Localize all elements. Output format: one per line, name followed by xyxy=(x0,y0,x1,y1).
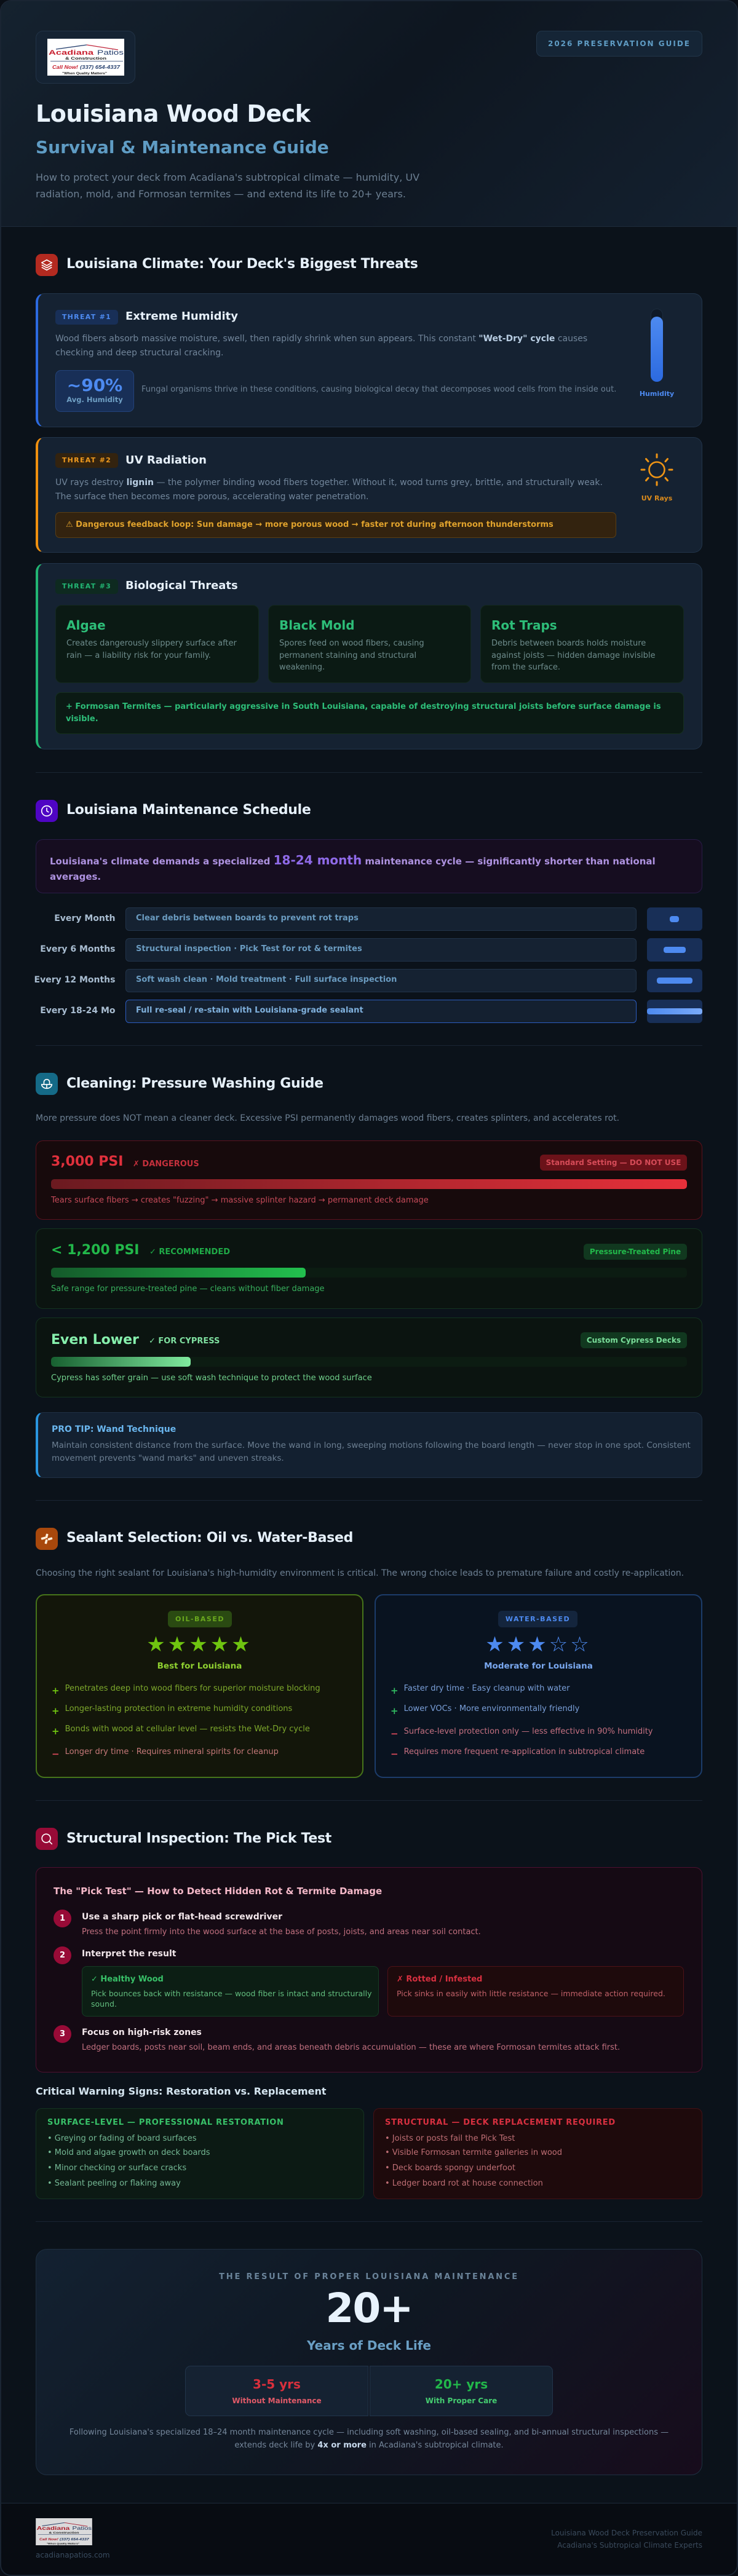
caption: Cypress has softer grain — use soft wash technique to protect the wood surface xyxy=(51,1373,372,1383)
heading: maintenance schedule: Louisiana Maintenance Schedule xyxy=(66,802,311,818)
pros and cons: Longer-lasting protection in extreme humidity conditions xyxy=(65,1704,292,1713)
sign list: • Ledger board rot at house connection xyxy=(385,2179,543,2188)
card: algae xyxy=(55,605,259,683)
stat: without maintenance xyxy=(185,2366,368,2416)
pros and cons: − xyxy=(391,1728,399,1739)
cleaning intro: More pressure does NOT mean a cleaner deck. Excessive PSI permanently damages wood fibers, creates splinters, and accelerates rot. xyxy=(36,1113,619,1123)
stat: with proper care: With Proper Care xyxy=(426,2396,497,2405)
step 3: 3 xyxy=(60,2029,65,2039)
pressure bar xyxy=(51,1268,687,1278)
stat: without maintenance: Without Maintenance xyxy=(232,2396,322,2405)
callout: maintenance cycle xyxy=(36,839,702,893)
logo image xyxy=(47,39,124,76)
panel: structural xyxy=(373,2108,702,2199)
header description xyxy=(36,172,419,199)
pressure value: 3,000 PSI xyxy=(51,1154,123,1169)
rating label: Best for Louisiana xyxy=(157,1661,242,1671)
pros and cons: + xyxy=(52,1705,60,1717)
pros and cons: Longer dry time · Requires mineral spirits for cleanup xyxy=(65,1747,279,1756)
step 2 xyxy=(54,1946,176,1964)
caption: Safe range for pressure-treated pine — cleans without fiber damage xyxy=(51,1284,325,1294)
pros and cons: + xyxy=(391,1705,399,1717)
pros and cons: − xyxy=(391,1748,399,1760)
sign list: • Deck boards spongy underfoot xyxy=(385,2163,515,2173)
card: rot traps: Debris between boards holds moisture xyxy=(491,639,646,648)
result label: THE RESULT OF PROPER LOUISIANA MAINTENANCE xyxy=(219,2272,519,2282)
sign list xyxy=(47,2134,210,2188)
result: healthy wood xyxy=(82,1966,379,2017)
result: rotted wood: Pick sinks in easily with little resistance — immediate action required. xyxy=(397,1989,665,1998)
schedule row 2 xyxy=(40,938,702,962)
stat: average humidity xyxy=(55,370,134,412)
threat title: Extreme Humidity xyxy=(125,310,238,323)
heading: cleaning: Cleaning: Pressure Washing Guide xyxy=(66,1076,323,1091)
type tag xyxy=(498,1611,577,1627)
step 2: 2 xyxy=(60,1950,65,1960)
footer xyxy=(0,2503,738,2576)
logo image: Acadiana xyxy=(49,49,94,57)
stat: without maintenance: 3-5 yrs xyxy=(253,2377,301,2392)
threat tag xyxy=(55,453,118,468)
tip text: Maintain consistent distance from the surface. Move the wand in long, sweeping motions following the board length — never stop in one spot. Consistent xyxy=(52,1440,691,1450)
schedule row 2: Structural inspection · Pick Test for rot & termites xyxy=(136,944,362,954)
result: healthy wood: ✓ Healthy Wood xyxy=(91,1975,164,1984)
pressure card: even lower xyxy=(36,1318,702,1397)
logo image: Call Now! xyxy=(52,65,78,70)
logo image: Patios xyxy=(97,49,124,57)
step 3 xyxy=(54,2025,620,2052)
threat title: UV Radiation xyxy=(125,454,207,467)
card: black mold: Black Mold xyxy=(279,618,355,633)
pressure status: ✗ DANGEROUS xyxy=(133,1160,199,1169)
rating label: Moderate for Louisiana xyxy=(484,1661,593,1671)
pressure status: ✓ RECOMMENDED xyxy=(149,1247,230,1257)
badge: Custom Cypress Decks xyxy=(587,1336,681,1345)
footer logo: Acadiana xyxy=(37,2526,70,2531)
sign list: • Minor checking or surface cracks xyxy=(47,2163,186,2173)
schedule row 4: Full re-seal / re-stain with Louisiana-grade sealant xyxy=(136,1006,363,1015)
section icon: magnifier xyxy=(36,1828,58,1850)
pros and cons: Penetrates deep into wood fibers for superior moisture blocking xyxy=(65,1684,320,1693)
panel heading: SURFACE-LEVEL — PROFESSIONAL RESTORATION xyxy=(47,2118,284,2127)
footer logo: (337) 654-4337 xyxy=(60,2538,90,2542)
icon: sun xyxy=(641,454,673,486)
sign list: • Mold and algae growth on deck boards xyxy=(47,2148,210,2157)
panel: water-based xyxy=(375,1594,702,1778)
edition badge xyxy=(536,31,702,57)
callout: maintenance cycle: Louisiana's climate demands a specialized 18-24 month maintenance cycle — significantly shorter than national xyxy=(50,852,656,867)
footer logo: & Construction xyxy=(49,2531,79,2535)
schedule row 2: Every 6 Months xyxy=(40,944,116,954)
schedule row 1: Every Month xyxy=(54,914,116,923)
panel: pick test xyxy=(36,1867,702,2072)
threat tag: THREAT #3 xyxy=(62,582,111,590)
card: rot traps: from the surface. xyxy=(491,663,560,672)
pros and cons: Bonds with wood at cellular level — resists the Wet-Dry cycle xyxy=(65,1725,310,1734)
card: black mold: weakening. xyxy=(279,663,325,672)
logo image: "When Quality Matters" xyxy=(62,72,108,76)
pressure status: ✓ FOR CYPRESS xyxy=(149,1337,220,1346)
caption: Tears surface fibers → creates "fuzzing" → massive splinter hazard → permanent deck damage xyxy=(51,1196,429,1205)
footer logo xyxy=(36,2518,92,2545)
star rating: ★★★☆☆ xyxy=(485,1632,592,1657)
sign list: • Joists or posts fail the Pick Test xyxy=(385,2134,515,2143)
stat: average humidity: ~90% xyxy=(67,375,122,395)
panel heading: STRUCTURAL — DECK REPLACEMENT REQUIRED xyxy=(385,2118,616,2127)
termite callout xyxy=(55,692,684,734)
panel: threat 1 humidity xyxy=(36,293,702,427)
callout: maintenance cycle: averages. xyxy=(50,871,101,882)
badge xyxy=(581,1332,687,1348)
schedule row 4 xyxy=(40,1000,702,1023)
heading: sealant: Sealant Selection: Oil vs. Water-Based xyxy=(66,1530,353,1546)
subtitle: Survival & Maintenance Guide xyxy=(36,137,329,157)
schedule row 3: Soft wash clean · Mold treatment · Full surface inspection xyxy=(136,975,397,984)
warning callout xyxy=(55,512,616,538)
result: rotted wood: ✗ Rotted / Infested xyxy=(397,1975,482,1984)
threat description xyxy=(55,333,587,358)
pressure bar xyxy=(51,1179,687,1189)
panel: threat 3 biological xyxy=(36,563,702,749)
step 3: Focus on high-risk zones xyxy=(82,2028,202,2037)
badge: Pressure-Treated Pine xyxy=(590,1247,681,1256)
stat: with proper care: 20+ yrs xyxy=(435,2377,488,2392)
footer logo: Patios xyxy=(73,2526,92,2531)
tip text xyxy=(52,1440,691,1463)
threat tag xyxy=(55,579,118,594)
card: algae: Algae xyxy=(66,618,106,633)
type tag: WATER-BASED xyxy=(506,1615,570,1623)
sign list: • Visible Formosan termite galleries in wood xyxy=(385,2148,562,2157)
panel: oil-based xyxy=(36,1594,363,1778)
threat tag: THREAT #2 xyxy=(62,456,111,464)
section icon: pressure washer xyxy=(36,1073,58,1095)
result description: Following Louisiana's specialized 18–24 month maintenance cycle — including soft washing, oil-based sealing, and bi-annual structural inspections — xyxy=(69,2428,669,2437)
panel: result xyxy=(36,2249,702,2475)
warning callout: ⚠ Dangerous feedback loop: Sun damage → more porous wood → faster rot during afternoon thunderstorms xyxy=(66,520,554,529)
card: black mold: Spores feed on wood fibers, causing xyxy=(279,639,424,648)
result description xyxy=(69,2428,669,2450)
big number caption: Years of Deck Life xyxy=(307,2338,431,2353)
step 1: 1 xyxy=(60,1913,65,1923)
step 1: Use a sharp pick or flat-head screwdriver xyxy=(82,1912,282,1922)
badge: Standard Setting — DO NOT USE xyxy=(546,1158,681,1167)
schedule row 1 xyxy=(54,907,702,931)
sealant intro: Choosing the right sealant for Louisiana's high-humidity environment is critical. The wrong choice leads to premature failure and costly re-application. xyxy=(36,1568,684,1578)
type tag: OIL-BASED xyxy=(175,1615,224,1623)
header description: How to protect your deck from Acadiana's subtropical climate — humidity, UV xyxy=(36,172,419,183)
pros and cons: − xyxy=(52,1748,60,1760)
panel title: The "Pick Test" — How to Detect Hidden Rot & Termite Damage xyxy=(54,1886,382,1897)
result: rotted wood xyxy=(387,1966,684,2017)
heading: climate threats: Louisiana Climate: Your Deck's Biggest Threats xyxy=(66,256,418,272)
footer credits: Louisiana Wood Deck Preservation Guide xyxy=(551,2529,702,2537)
result: healthy wood: Pick bounces back with resistance — wood fiber is intact and structurally xyxy=(91,1989,372,1998)
termite callout: + Formosan Termites — particularly aggressive in South Louisiana, capable of destroying structural joists before surface damage is xyxy=(66,702,661,711)
sign list: • Greying or fading of board surfaces xyxy=(47,2134,196,2143)
threat title: Biological Threats xyxy=(125,579,238,592)
step 1 xyxy=(54,1910,481,1937)
threat tag: THREAT #1 xyxy=(62,313,111,321)
panel: threat 2 UV xyxy=(36,437,702,553)
type tag xyxy=(168,1611,232,1627)
humidity note: Fungal organisms thrive in these conditions, causing biological decay that decomposes wood cells from the inside out. xyxy=(141,385,616,394)
pros and cons: Surface-level protection only — less effective in 90% humidity xyxy=(404,1727,653,1736)
schedule row 3 xyxy=(34,969,702,992)
step 1: Press the point firmly into the wood surface at the base of posts, joists, and areas near soil contact. xyxy=(82,1927,481,1937)
section icon: sealant xyxy=(36,1528,58,1550)
card: algae: Creates dangerously slippery surface after xyxy=(66,639,237,648)
pros and cons: + xyxy=(391,1685,399,1696)
threat description: UV rays destroy lignin — the polymer binding wood fibers together. Without it, wood turns grey, brittle, and structurally weak. xyxy=(55,477,603,487)
big number: 20+ xyxy=(325,2285,413,2332)
footer logo: "When Quality Matters" xyxy=(47,2543,80,2545)
badge xyxy=(584,1244,687,1260)
tip title: PRO TIP: Wand Technique xyxy=(52,1424,176,1434)
card: algae: rain — a liability risk for your family. xyxy=(66,650,211,660)
sign list xyxy=(385,2134,562,2188)
step 3: Ledger boards, posts near soil, beam ends, and areas beneath debris accumulation — these are where Formosan termites attack first. xyxy=(82,2043,620,2052)
badge xyxy=(540,1155,687,1171)
threat description: checking and deep structural cracking. xyxy=(55,348,223,358)
step 2: Interpret the result xyxy=(82,1949,176,1959)
schedule row 4: Every 18-24 Mo xyxy=(40,1006,116,1016)
footer domain: acadianapatios.com xyxy=(36,2551,110,2559)
logo card xyxy=(36,31,135,84)
schedule row 3: Every 12 Months xyxy=(34,975,116,985)
card: rot traps xyxy=(480,605,684,683)
pros and cons: Faster dry time · Easy cleanup with water xyxy=(404,1684,569,1693)
title: Louisiana Wood Deck xyxy=(36,100,310,127)
pressure value: Even Lower xyxy=(51,1332,139,1348)
pressure card: 3000 PSI xyxy=(36,1140,702,1220)
footer credits xyxy=(551,2529,702,2550)
schedule row 1: Clear debris between boards to prevent rot traps xyxy=(136,914,359,923)
card: black mold xyxy=(268,605,471,683)
section icon: climate layers xyxy=(36,254,58,276)
meter label: Humidity xyxy=(640,390,674,398)
pro tip xyxy=(36,1412,702,1478)
stat: average humidity: Avg. Humidity xyxy=(66,395,123,404)
card: black mold: permanent staining and structural xyxy=(279,650,416,660)
pros and cons: + xyxy=(52,1726,60,1737)
card: rot traps: against joists — hidden damage invisible xyxy=(491,650,655,660)
star rating: ★★★★★ xyxy=(146,1632,253,1657)
footer credits: Acadiana's Subtropical Climate Experts xyxy=(557,2541,702,2550)
logo image: (337) 654-4337 xyxy=(80,65,121,70)
stat: with proper care xyxy=(370,2366,553,2416)
threat tag xyxy=(55,310,118,325)
pressure bar xyxy=(51,1357,687,1367)
pressure value: < 1,200 PSI xyxy=(51,1243,139,1258)
pros and cons xyxy=(52,1684,320,1760)
edition badge: 2026 PRESERVATION GUIDE xyxy=(548,39,691,48)
pros and cons xyxy=(391,1684,653,1760)
result description: extends deck life by 4x or more in Acadiana's subtropical climate. xyxy=(234,2441,504,2450)
threat description xyxy=(55,477,603,502)
termite callout: visible. xyxy=(66,714,98,724)
header description: radiation, mold, and Formosan termites — and extend its life to 20+ years. xyxy=(36,188,406,199)
section icon: clock xyxy=(36,800,58,822)
sun label: UV Rays xyxy=(641,494,672,502)
pros and cons: Requires more frequent re-application in subtropical climate xyxy=(404,1747,645,1756)
tip text: movement prevents "wand marks" and uneven streaks. xyxy=(52,1453,284,1463)
heading: warning signs: Critical Warning Signs: Restoration vs. Replacement xyxy=(36,2085,326,2097)
footer logo: Call Now! xyxy=(39,2538,58,2542)
card: rot traps: Rot Traps xyxy=(491,618,557,633)
header band xyxy=(0,0,738,227)
threat description: Wood fibers absorb massive moisture, swell, then rapidly shrink when sun appears. This constant "Wet-Dry" cycle causes xyxy=(55,333,587,343)
threat description: The surface then becomes more porous, accelerating water penetration. xyxy=(55,492,368,502)
sign list: • Sealant peeling or flaking away xyxy=(47,2179,181,2188)
pros and cons: Lower VOCs · More environmentally friendly xyxy=(404,1704,579,1713)
pressure card: 1200 PSI xyxy=(36,1228,702,1309)
panel: surface level xyxy=(36,2108,364,2199)
logo image: & Construction xyxy=(65,57,106,61)
pros and cons: + xyxy=(52,1685,60,1696)
heading: structural inspection: Structural Inspection: The Pick Test xyxy=(66,1831,331,1846)
result: healthy wood: sound. xyxy=(91,1999,117,2009)
humidity meter xyxy=(651,309,663,382)
